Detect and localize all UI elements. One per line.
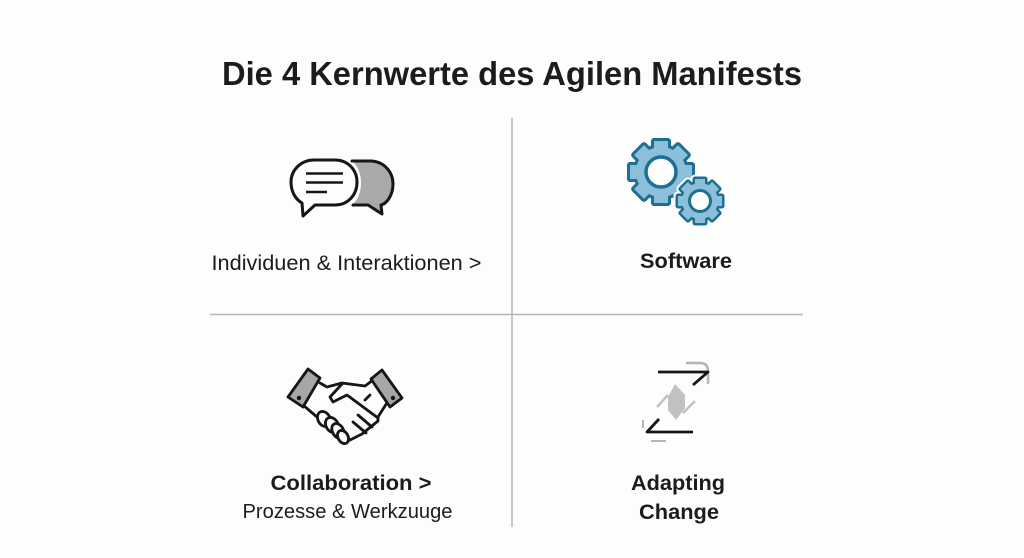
icon: gears (630, 141, 722, 223)
label: adapting change: Adapting (631, 472, 725, 495)
panel: individuals and interactions (212, 160, 482, 275)
icon: speech bubbles (291, 160, 393, 216)
label: adapting change: Change (639, 501, 719, 524)
icon: handshake (288, 369, 402, 446)
label: individuals: Individuen & Interaktionen > (212, 252, 482, 275)
icon: change arrows (643, 363, 708, 441)
panel: collaboration (242, 369, 452, 523)
label: collaboration: Collaboration > (270, 472, 432, 495)
panel: adapting change (631, 363, 725, 524)
label: adapting change (631, 472, 725, 524)
title: Die 4 Kernwerte des Agilen Manifests (222, 55, 802, 92)
label: software: Software (640, 250, 732, 273)
panel: software (630, 141, 732, 273)
label: processes and tools: Prozesse & Werkzuuge (242, 501, 452, 523)
